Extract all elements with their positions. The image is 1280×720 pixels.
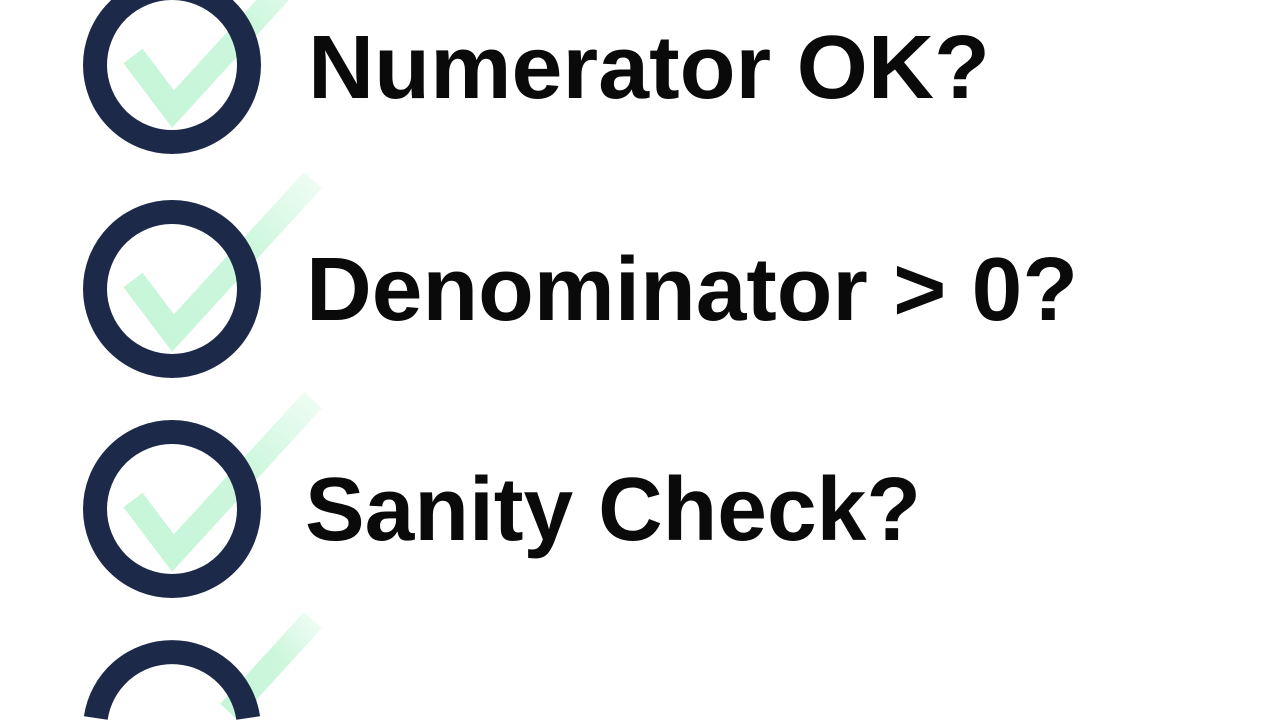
- icon: ring 3: [95, 432, 249, 586]
- icon: check 1: [133, 0, 313, 109]
- icon: check 3: [133, 400, 313, 553]
- icon: ring 2: [95, 212, 249, 366]
- icon: check 4: [229, 620, 313, 712]
- item 4: partial: [96, 620, 313, 718]
- label 1: Numerator OK?: [308, 18, 990, 118]
- label 2: Denominator > 0?: [306, 240, 1078, 340]
- item 3: sanity check: [95, 400, 921, 586]
- item 1: numerator: [95, 0, 990, 142]
- label 3: Sanity Check?: [305, 460, 921, 560]
- icon: check 2: [133, 180, 313, 333]
- item 2: denominator: [95, 180, 1078, 366]
- icon: ring 1: [95, 0, 249, 142]
- icon: ring 4: [96, 652, 248, 718]
